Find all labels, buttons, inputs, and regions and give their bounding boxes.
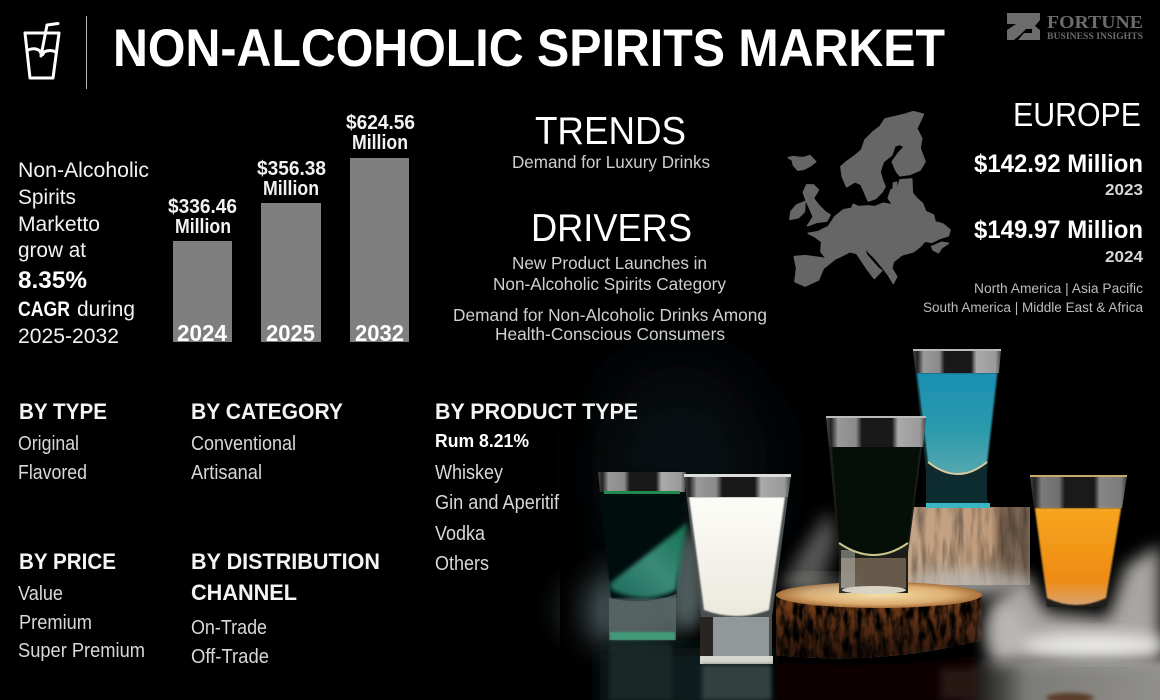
segment: by distribution channel bbox=[191, 549, 380, 668]
logo: Fortune Business Insights bbox=[1007, 12, 1143, 42]
front smoke bbox=[784, 577, 1160, 658]
segment: by type: Flavored bbox=[18, 462, 87, 484]
segment: by product type: Gin and Aperitif bbox=[435, 492, 559, 514]
panel: drivers: DRIVERS bbox=[531, 207, 692, 250]
photo: shot glasses with smoke bbox=[560, 345, 1160, 700]
segment: by product type: Others bbox=[435, 553, 489, 575]
panel: drivers bbox=[453, 207, 767, 344]
bar 2024: $336.46 bbox=[168, 196, 237, 218]
text block: CAGR statement bbox=[18, 159, 149, 348]
panel: drivers: New Product Launches in bbox=[512, 253, 707, 273]
segment: by type bbox=[18, 399, 107, 484]
logo: Fortune Business Insights: FORTUNE bbox=[1047, 12, 1143, 32]
text block: CAGR statement: CAGR bbox=[18, 298, 70, 321]
segment: by type: BY TYPE bbox=[19, 399, 107, 424]
bar 2032: 2032 bbox=[355, 320, 404, 346]
segment: by category: Conventional bbox=[191, 433, 296, 455]
text block: CAGR statement: 8.35% bbox=[18, 267, 87, 294]
segment: by product type bbox=[435, 399, 638, 575]
segment: by price: Premium bbox=[19, 612, 92, 634]
text block: CAGR statement: Spirits bbox=[18, 186, 76, 209]
left smoke bbox=[563, 530, 770, 700]
panel: drivers: Demand for Non-Alcoholic Drinks Among bbox=[453, 305, 767, 325]
panel: trends: TRENDS bbox=[535, 110, 686, 153]
icon: drink cup bbox=[25, 24, 59, 78]
segment: by distribution channel: CHANNEL bbox=[191, 580, 297, 605]
bar 2024 bbox=[168, 196, 237, 346]
white glass bbox=[684, 474, 791, 700]
bar 2032: Million bbox=[352, 132, 408, 154]
segment: by category: BY CATEGORY bbox=[191, 399, 343, 424]
panel: trends: Demand for Luxury Drinks bbox=[512, 152, 710, 172]
panel: Europe stats: $149.97 Million bbox=[974, 216, 1143, 244]
panel: Europe stats: 2023 bbox=[1105, 182, 1143, 199]
text block: CAGR statement: 2025-2032 bbox=[18, 325, 119, 348]
panel: Europe stats: EUROPE bbox=[1013, 96, 1141, 133]
panel: drivers: Non-Alcoholic Spirits Category bbox=[493, 274, 726, 294]
bar 2025: $356.38 bbox=[257, 158, 326, 180]
table reflection bbox=[960, 660, 1160, 700]
blue glass bbox=[913, 349, 1001, 508]
panel: Europe stats: 2024 bbox=[1105, 249, 1143, 266]
table reflection: log bbox=[776, 656, 1094, 700]
bar chart: market size bbox=[168, 112, 415, 346]
bar 2024: Million bbox=[175, 216, 231, 238]
panel: trends bbox=[512, 110, 710, 172]
segment: by price bbox=[18, 549, 145, 662]
panel: Europe stats: North America | Asia Pacific bbox=[974, 281, 1143, 296]
segment: by product type: Whiskey bbox=[435, 462, 503, 484]
title: NON-ALCOHOLIC SPIRITS MARKET bbox=[113, 19, 945, 78]
divider bbox=[86, 16, 87, 89]
segment: by price: BY PRICE bbox=[19, 549, 116, 574]
segment: by price: Super Premium bbox=[18, 640, 145, 662]
bar 2025: Million bbox=[263, 178, 319, 200]
segment: by distribution channel: BY DISTRIBUTION bbox=[191, 549, 380, 574]
orange glass bbox=[1030, 475, 1127, 607]
panel: Europe stats bbox=[923, 96, 1143, 315]
segment: by category bbox=[191, 399, 343, 484]
left fade bbox=[560, 345, 600, 700]
bar 2024: 2024 bbox=[177, 320, 227, 346]
center dark glass bbox=[826, 416, 926, 594]
bar 2025 bbox=[257, 158, 326, 346]
panel: Europe stats: South America | Middle East & Africa bbox=[923, 300, 1143, 315]
segment: by distribution channel: On-Trade bbox=[191, 617, 267, 639]
text block: CAGR statement: grow at bbox=[18, 239, 86, 262]
panel: Europe stats: $142.92 Million bbox=[974, 150, 1143, 178]
right smoke back bbox=[782, 510, 1160, 662]
text block: CAGR statement: Marketto bbox=[18, 213, 100, 236]
text block: CAGR statement: during bbox=[77, 298, 135, 321]
bar 2032: $624.56 bbox=[346, 112, 415, 134]
panel: drivers: Health-Conscious Consumers bbox=[495, 324, 725, 344]
segment: by price: Value bbox=[18, 583, 63, 605]
logo: Fortune Business Insights: BUSINESS INSIGHTS bbox=[1047, 32, 1143, 42]
segment: by distribution channel: Off-Trade bbox=[191, 646, 269, 668]
segment: by product type: Vodka bbox=[435, 523, 486, 545]
map: Europe bbox=[788, 112, 950, 286]
background glow bbox=[590, 360, 770, 580]
text block: CAGR statement: Non-Alcoholic bbox=[18, 159, 149, 182]
bar 2032 bbox=[346, 112, 415, 346]
segment: by type: Original bbox=[18, 433, 79, 455]
green glass bbox=[598, 472, 687, 700]
bar 2025: 2025 bbox=[266, 320, 315, 346]
segment: by product type: BY PRODUCT TYPE bbox=[435, 399, 638, 424]
segment: by category: Artisanal bbox=[191, 462, 262, 484]
log bbox=[776, 582, 982, 658]
wood block bbox=[908, 507, 1030, 585]
segment: by product type: Rum 8.21% bbox=[435, 431, 529, 451]
